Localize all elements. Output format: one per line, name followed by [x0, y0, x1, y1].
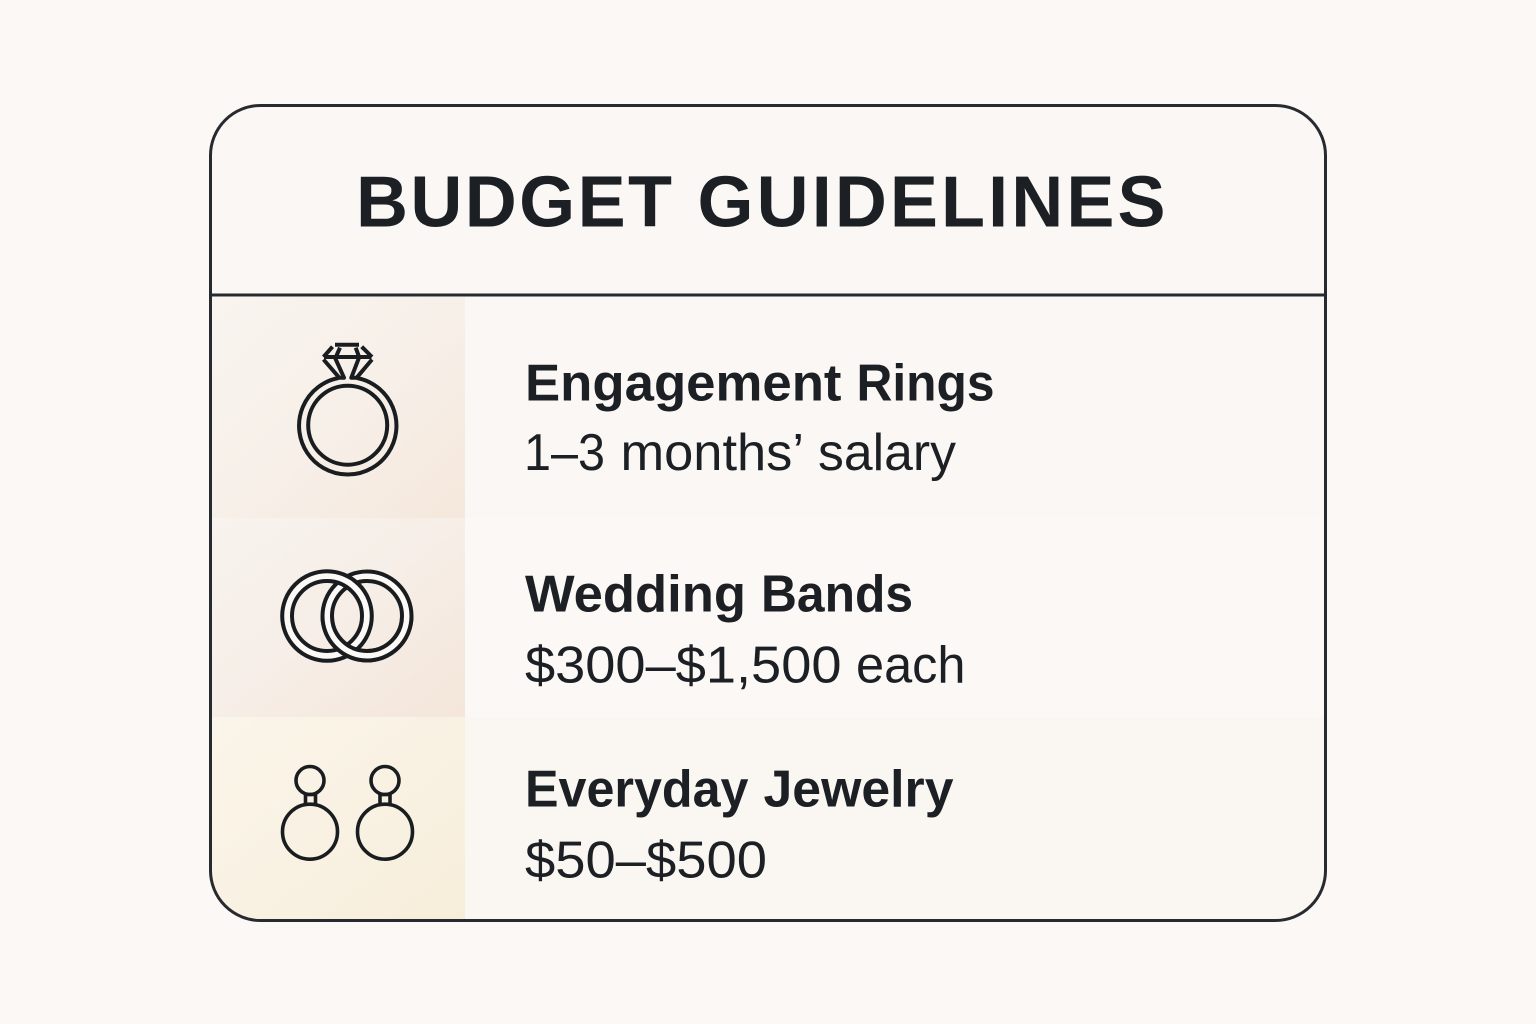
icon: drop earrings [282, 766, 412, 859]
text: engagement rings: salary [818, 424, 956, 482]
heading: GUIDELINES [698, 162, 1166, 242]
text: engagement rings: months’ [620, 424, 804, 482]
text: everyday jewelry: Everyday [525, 761, 749, 819]
text: wedding bands [525, 566, 966, 695]
row backgrounds [212, 297, 465, 919]
text: wedding bands: each [856, 637, 966, 695]
panel: budget guidelines card [210, 106, 1326, 921]
heading [356, 162, 1166, 242]
text: wedding bands: Bands [761, 566, 913, 624]
text: engagement rings [524, 355, 994, 482]
icon: engagement ring [299, 345, 396, 475]
card outline [210, 106, 1326, 920]
text: engagement rings: 1–3 [524, 424, 605, 482]
heading: BUDGET [356, 162, 672, 242]
text: wedding bands: $300–$1,500 [525, 637, 842, 695]
text: engagement rings: Engagement [525, 355, 842, 413]
text: everyday jewelry [525, 761, 954, 890]
icon: interlocked wedding bands [282, 571, 412, 661]
text: everyday jewelry: $50–$500 [525, 832, 767, 890]
text: wedding bands: Wedding [525, 566, 746, 624]
text: engagement rings: Rings [856, 355, 994, 413]
text: everyday jewelry: Jewelry [764, 761, 954, 819]
